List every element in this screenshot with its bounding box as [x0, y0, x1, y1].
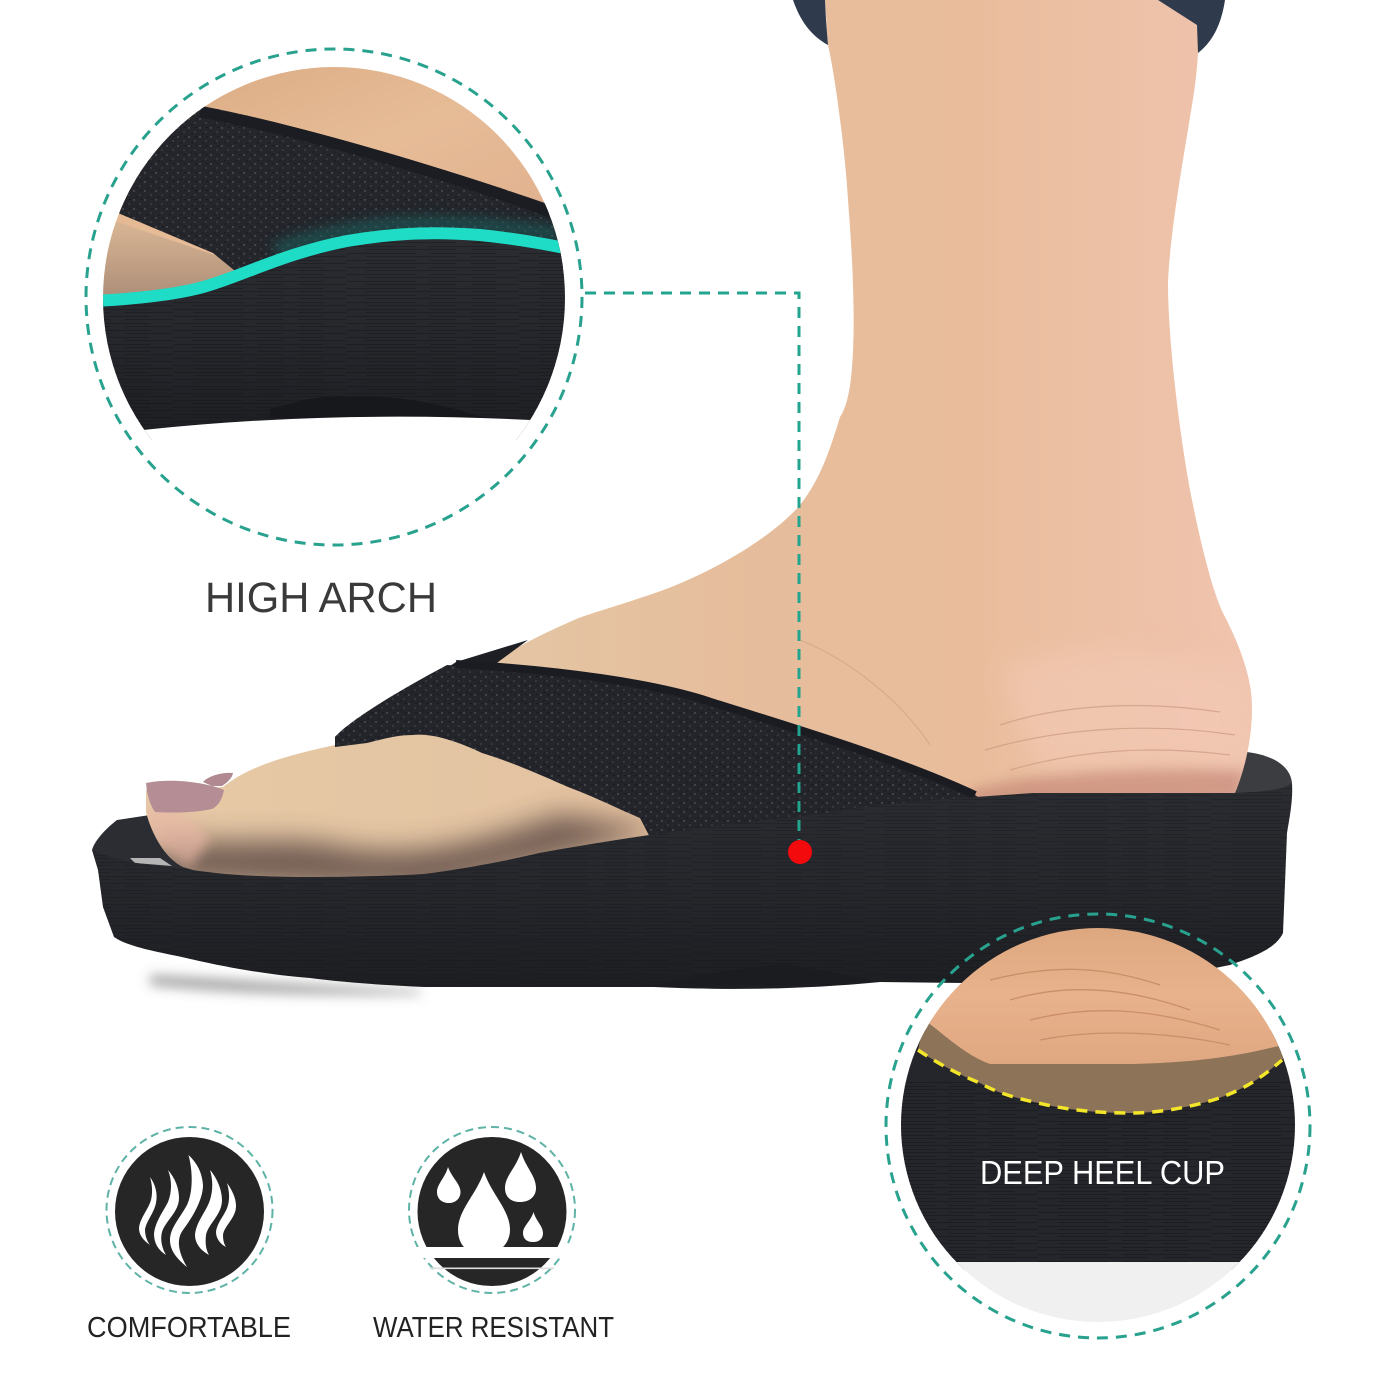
sandal footbed — [92, 752, 1292, 875]
big toe nail — [146, 781, 224, 813]
icon: comfortable flames — [106, 1127, 272, 1293]
label: water resistant: WATER RESISTANT — [373, 1312, 614, 1344]
ground shadow — [150, 975, 420, 995]
sandal strap — [335, 640, 990, 845]
inset: deep heel cup — [886, 914, 1310, 1338]
yellow heel cup outline — [918, 1050, 1282, 1113]
foot and leg — [146, 0, 1252, 890]
label: comfortable: COMFORTABLE — [87, 1312, 291, 1344]
trouser cuff — [793, 0, 1225, 53]
label: deep heel cup: DEEP HEEL CUP — [980, 1154, 1225, 1191]
heading: high arch: HIGH ARCH — [205, 574, 437, 622]
icon: water resistant drops — [409, 1127, 575, 1293]
product photo: foot in sandal — [92, 0, 1292, 995]
teal arch highlight — [95, 233, 570, 301]
inset: high arch — [86, 49, 582, 545]
second toe nail — [203, 773, 233, 786]
red marker dot — [788, 840, 812, 864]
callout leader line — [585, 293, 799, 840]
sandal sole — [92, 783, 1292, 989]
